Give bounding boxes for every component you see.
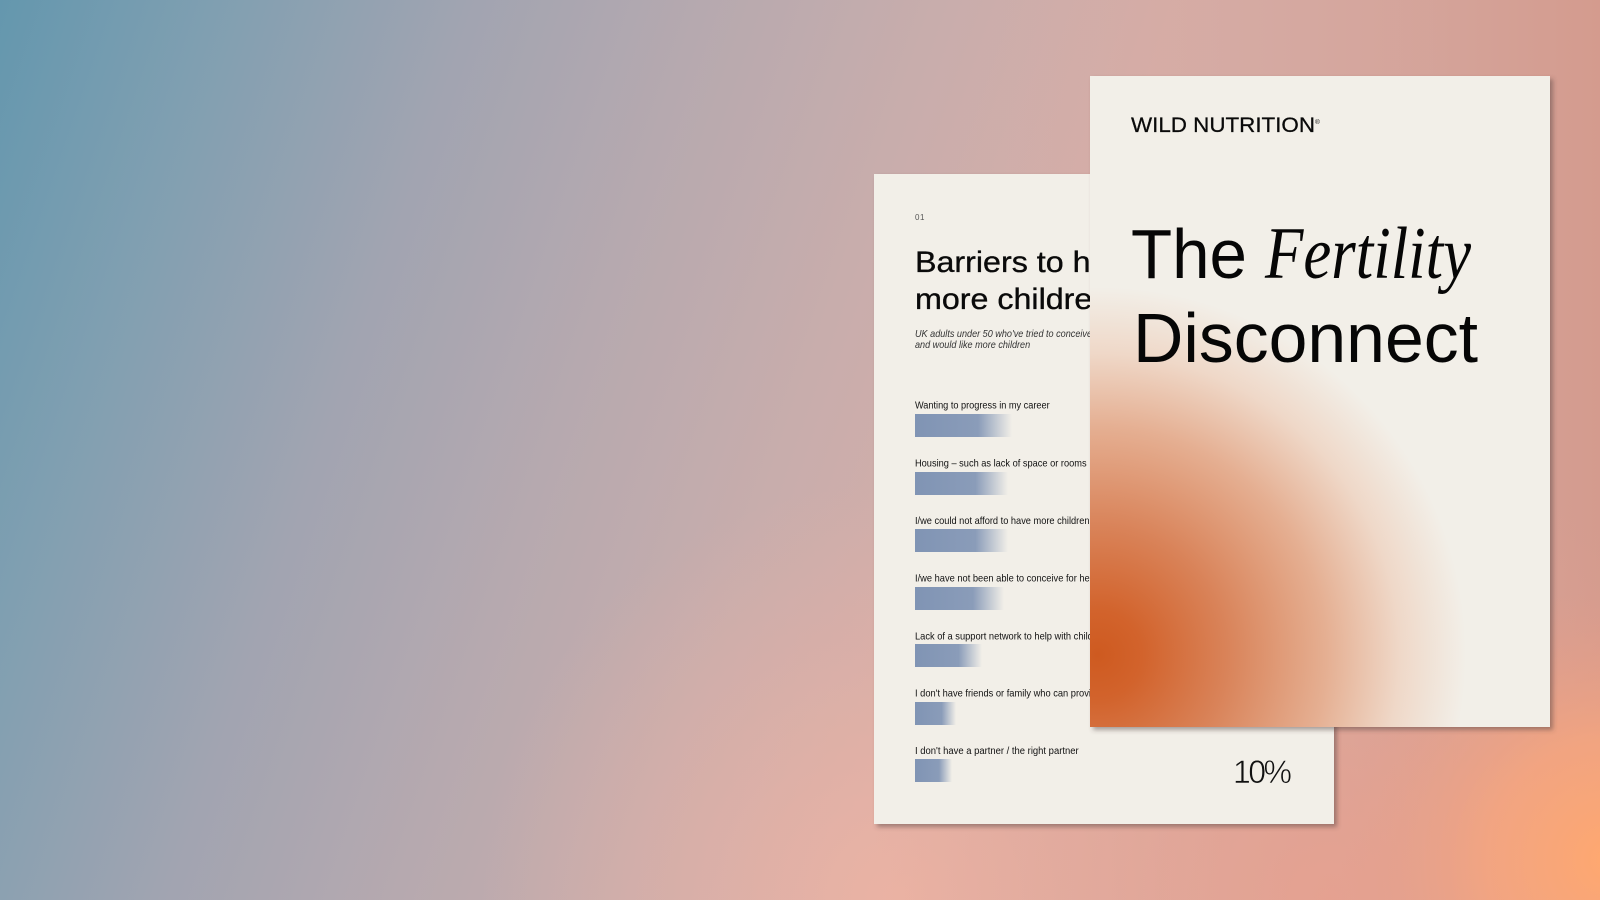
bar row: conceive: I/we have not been able to conceive for health reasons: [915, 573, 1141, 585]
bar row: career: Wanting to progress in my career: [915, 400, 1050, 412]
logo: wild nutrition: ®: [1315, 118, 1320, 126]
bar row: career: [915, 400, 1050, 437]
bar row: housing: Housing – such as lack of space or rooms: [915, 458, 1087, 470]
bar row: friends or family: I don't have friends or family who can provide childcare: [915, 688, 1141, 700]
bar row: afford: [915, 516, 1090, 552]
bar row: partner: [915, 746, 1079, 782]
bar row: friends or family: [915, 688, 1141, 725]
bar row: afford: I/we could not afford to have more children: [915, 516, 1090, 527]
cover title: [1131, 213, 1478, 377]
page number: 01: [915, 213, 925, 222]
panel: back report page: [874, 174, 1334, 824]
heading: barriers: Barriers to having: [915, 245, 1168, 279]
panel: front cover page: [1090, 76, 1550, 727]
subtitle: and would like more children: [915, 340, 1030, 351]
value: 10 percent: 10%: [1233, 754, 1292, 790]
cover title: Disconnect: [1133, 299, 1478, 377]
bar row: housing: [915, 458, 1087, 495]
gradient blob: [1090, 304, 1450, 727]
bar row: partner: I don't have a partner / the right partner: [915, 746, 1079, 757]
bar row: support network: Lack of a support network to help with childcare: [915, 631, 1111, 643]
cover title: Fertility: [1264, 213, 1471, 295]
subtitle: UK adults under 50 who've tried to conceive: [915, 329, 1092, 340]
heading: barriers: more children: [915, 282, 1110, 316]
bar row: conceive: [915, 573, 1141, 610]
cover title: The: [1131, 215, 1247, 293]
bar row: support network: [915, 631, 1111, 667]
logo: wild nutrition: WILD NUTRITION: [1131, 114, 1315, 137]
